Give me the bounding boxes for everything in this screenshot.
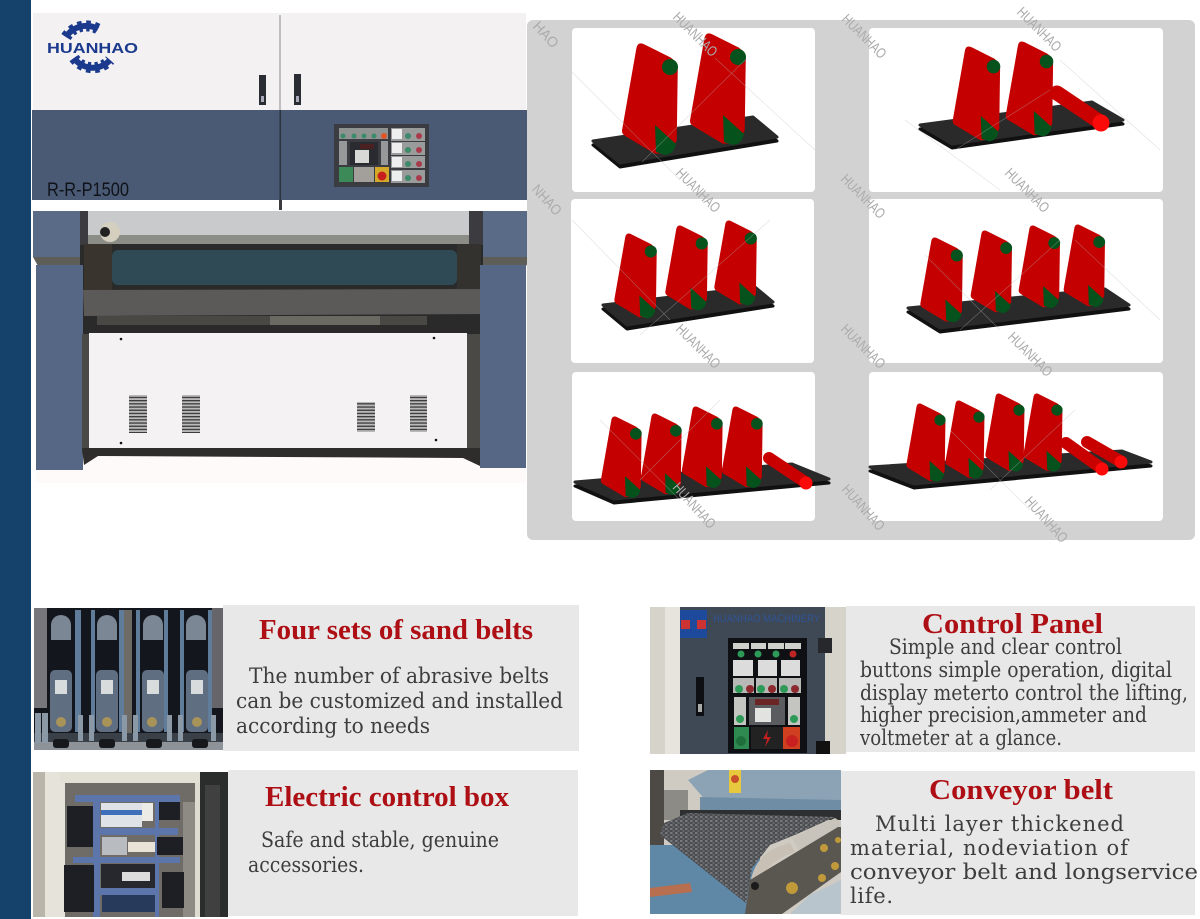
feature: conveyor belt	[650, 770, 1198, 915]
watermark lines and text: HUANHAO	[838, 12, 889, 62]
watermark lines and text: NHAO	[528, 182, 564, 219]
card: four sanding heads and two rollers	[869, 372, 1163, 521]
heading: Four sets of sand belts	[259, 614, 533, 646]
machine side columns	[33, 211, 532, 470]
photo: sand belts	[34, 608, 223, 750]
watermark lines and text: HUANHAO	[669, 10, 720, 60]
photo: control panel: HUANHAO MACHINERY	[713, 613, 821, 625]
machine upper cabinet doors	[33, 13, 526, 111]
feature: electric control box	[33, 770, 578, 917]
card: three sanding heads	[571, 199, 814, 363]
machine blue control band	[32, 110, 531, 210]
logo: HUANHAO: HUANHAO	[47, 40, 138, 57]
heading: Conveyor belt	[929, 774, 1113, 806]
machine control panel	[334, 124, 429, 187]
description: accessories.	[248, 853, 364, 877]
machine lower white panel with vents	[82, 333, 480, 466]
watermark lines and text: HUANHAO	[837, 172, 888, 222]
heading: Control Panel	[922, 608, 1103, 640]
watermark lines and text: HAO	[529, 19, 561, 52]
description	[850, 812, 1198, 908]
feature: four sets of sand belts	[34, 605, 579, 751]
watermark lines and text: HUANHAO	[672, 166, 723, 216]
photo: conveyor belt	[650, 770, 841, 914]
watermark lines and text: HUANHAO	[838, 482, 887, 534]
description: buttons simple operation, digital	[860, 658, 1172, 682]
machine illustration	[32, 13, 532, 483]
watermark lines and text: HUANHAO	[672, 322, 723, 372]
description	[859, 635, 1188, 750]
card: four sanding heads and one roller	[572, 372, 829, 521]
photo: control panel	[650, 607, 846, 754]
card: four sanding heads	[869, 199, 1163, 363]
description: life.	[850, 884, 893, 908]
watermark lines and text: HUANHAO	[669, 480, 718, 532]
description: higher precision,ammeter and	[860, 703, 1147, 727]
description: The number of abrasive belts	[249, 664, 549, 688]
logo: HUANHAO	[47, 26, 138, 68]
machine working section	[79, 211, 493, 334]
watermark lines and text: HUANHAO	[1021, 494, 1070, 546]
description	[236, 664, 563, 738]
watermark lines and text: HUANHAO	[1001, 166, 1052, 216]
description: Multi layer thickened	[875, 812, 1124, 836]
photo: electric control box	[33, 772, 228, 917]
description	[248, 828, 499, 877]
description: conveyor belt and longservice	[850, 860, 1198, 884]
description: can be customized and installed	[236, 689, 563, 713]
watermark lines and text: HUANHAO	[1004, 330, 1055, 380]
heading: Electric control box	[265, 781, 509, 813]
left sidebar	[0, 0, 31, 919]
feature: control panel	[650, 606, 1195, 754]
description: according to needs	[236, 714, 430, 738]
description: Simple and clear control	[889, 635, 1122, 659]
model label: R-R-P1500	[47, 180, 129, 201]
description: voltmeter at a glance.	[859, 726, 1062, 750]
description: Safe and stable, genuine	[261, 828, 499, 852]
card: two sanding heads	[572, 28, 815, 192]
watermark lines and text: HUANHAO	[1013, 5, 1064, 55]
card: two sanding heads and one roller	[869, 28, 1163, 192]
description: material, nodeviation of	[850, 836, 1130, 860]
watermark lines and text: HUANHAO	[837, 322, 888, 372]
panel: abrasive belt configurations	[527, 20, 1195, 540]
watermark lines and text	[528, 5, 1160, 546]
